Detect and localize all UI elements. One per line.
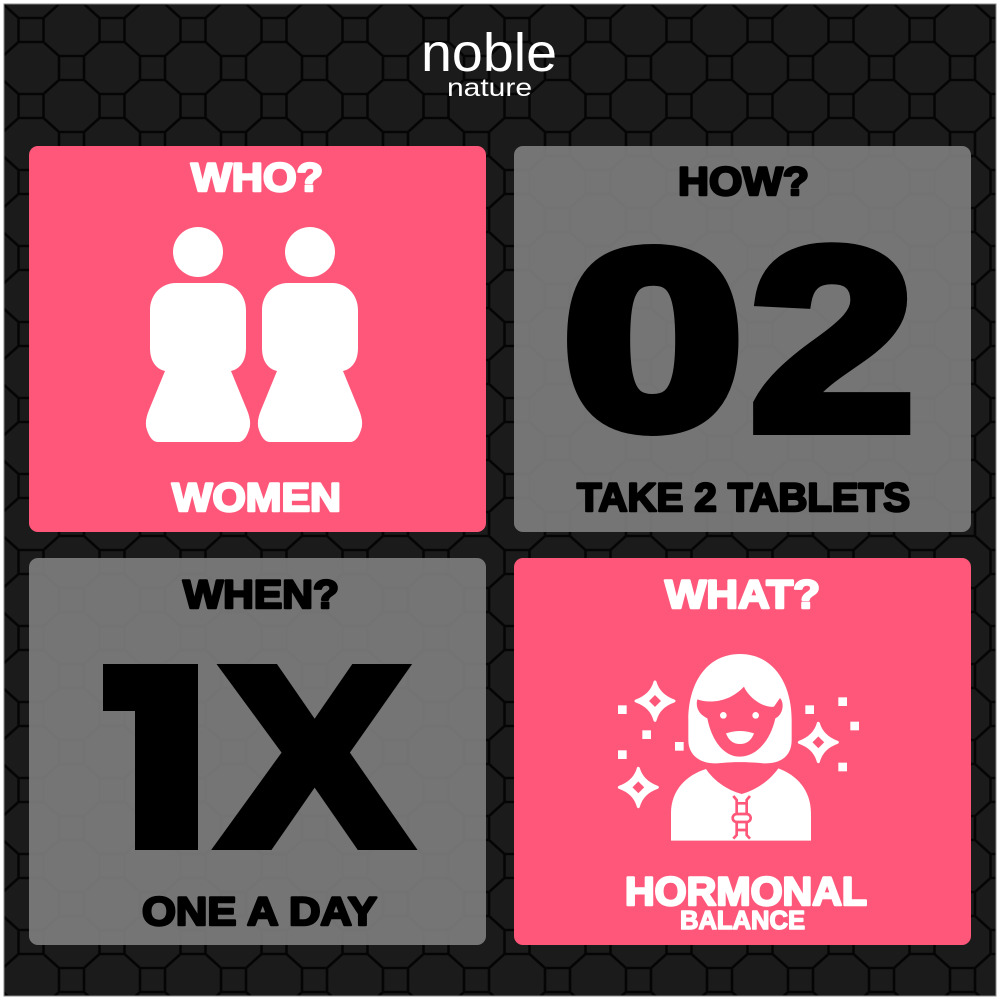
big number 02: 0 <box>564 200 742 479</box>
big number 02: 2 <box>751 197 914 483</box>
label: hormonal balance <box>625 870 867 935</box>
big number 02 <box>564 197 914 483</box>
panel: how <box>514 146 971 532</box>
big number 1X: X <box>223 617 406 896</box>
label: hormonal balance: HORMONAL <box>625 870 867 914</box>
brand logo: nature <box>447 74 532 102</box>
icon: happy woman with sparkles <box>618 654 859 841</box>
icon: two women <box>146 227 362 442</box>
panel: what <box>514 558 971 945</box>
label: take 2 tablets: TAKE 2 TABLETS <box>577 476 910 520</box>
label: one a day: ONE A DAY <box>142 890 377 934</box>
label: hormonal balance: BALANCE <box>680 905 805 935</box>
brand logo: noble <box>421 23 557 83</box>
heading: how: HOW? <box>678 160 809 204</box>
panel: when <box>29 558 486 945</box>
heading: when: WHEN? <box>183 573 339 617</box>
heading: what: WHAT? <box>665 573 820 617</box>
label: women: WOMEN <box>172 476 341 520</box>
heading: who: WHO? <box>191 156 323 200</box>
big number 1X: 1 <box>92 616 232 905</box>
big number 1X <box>103 664 418 850</box>
panel: who <box>29 146 486 532</box>
